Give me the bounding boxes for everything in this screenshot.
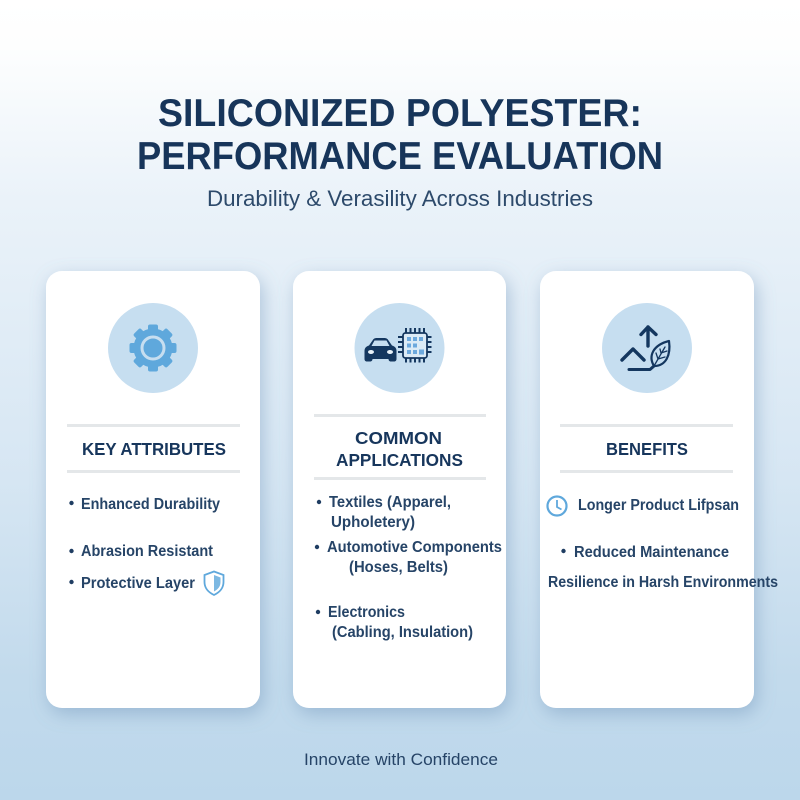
- title: PERFORMANCE EVALUATION: [137, 135, 663, 178]
- attributes list: Enhanced Durability: [81, 496, 220, 513]
- panel: common applications: [293, 271, 506, 708]
- applications list: [315, 494, 502, 641]
- heading: common applications: COMMON: [355, 428, 442, 448]
- applications list: Automotive Components: [327, 539, 502, 556]
- icon: car and chip: [354, 303, 444, 393]
- heading: common applications: APPLICATIONS: [336, 450, 463, 470]
- heading: common applications: [336, 428, 463, 470]
- applications list: (Cabling, Insulation): [332, 624, 473, 641]
- attributes list: [69, 496, 220, 592]
- applications list: Electronics: [328, 604, 405, 621]
- benefits list: [548, 497, 778, 591]
- attributes list: Abrasion Resistant: [81, 543, 213, 560]
- chip: [398, 328, 432, 362]
- applications list: Textiles (Apparel,: [329, 494, 451, 511]
- benefits list: Longer Product Lifpsan: [578, 497, 739, 514]
- panel: benefits: [540, 271, 778, 708]
- icon: gear: [108, 303, 198, 393]
- subtitle: Durability & Verasility Across Industries: [207, 186, 593, 211]
- title: SILICONIZED POLYESTER:: [158, 92, 642, 135]
- benefits list: Reduced Maintenance: [574, 544, 729, 561]
- applications list: Upholetery): [331, 514, 415, 531]
- car: [364, 338, 396, 362]
- applications list: (Hoses, Belts): [349, 559, 448, 576]
- heading: benefits: BENEFITS: [606, 439, 688, 459]
- benefits list: Resilience in Harsh Environments: [548, 574, 778, 591]
- icon: clock: [548, 496, 566, 516]
- heading: key attributes: KEY ATTRIBUTES: [82, 439, 226, 459]
- icon: shield: [204, 572, 224, 595]
- attributes list: Protective Layer: [81, 575, 195, 592]
- panel: key attributes: [46, 271, 260, 708]
- icon: growth arrow and leaf: [602, 303, 692, 393]
- footer tagline: Innovate with Confidence: [304, 750, 498, 769]
- title: [137, 92, 663, 178]
